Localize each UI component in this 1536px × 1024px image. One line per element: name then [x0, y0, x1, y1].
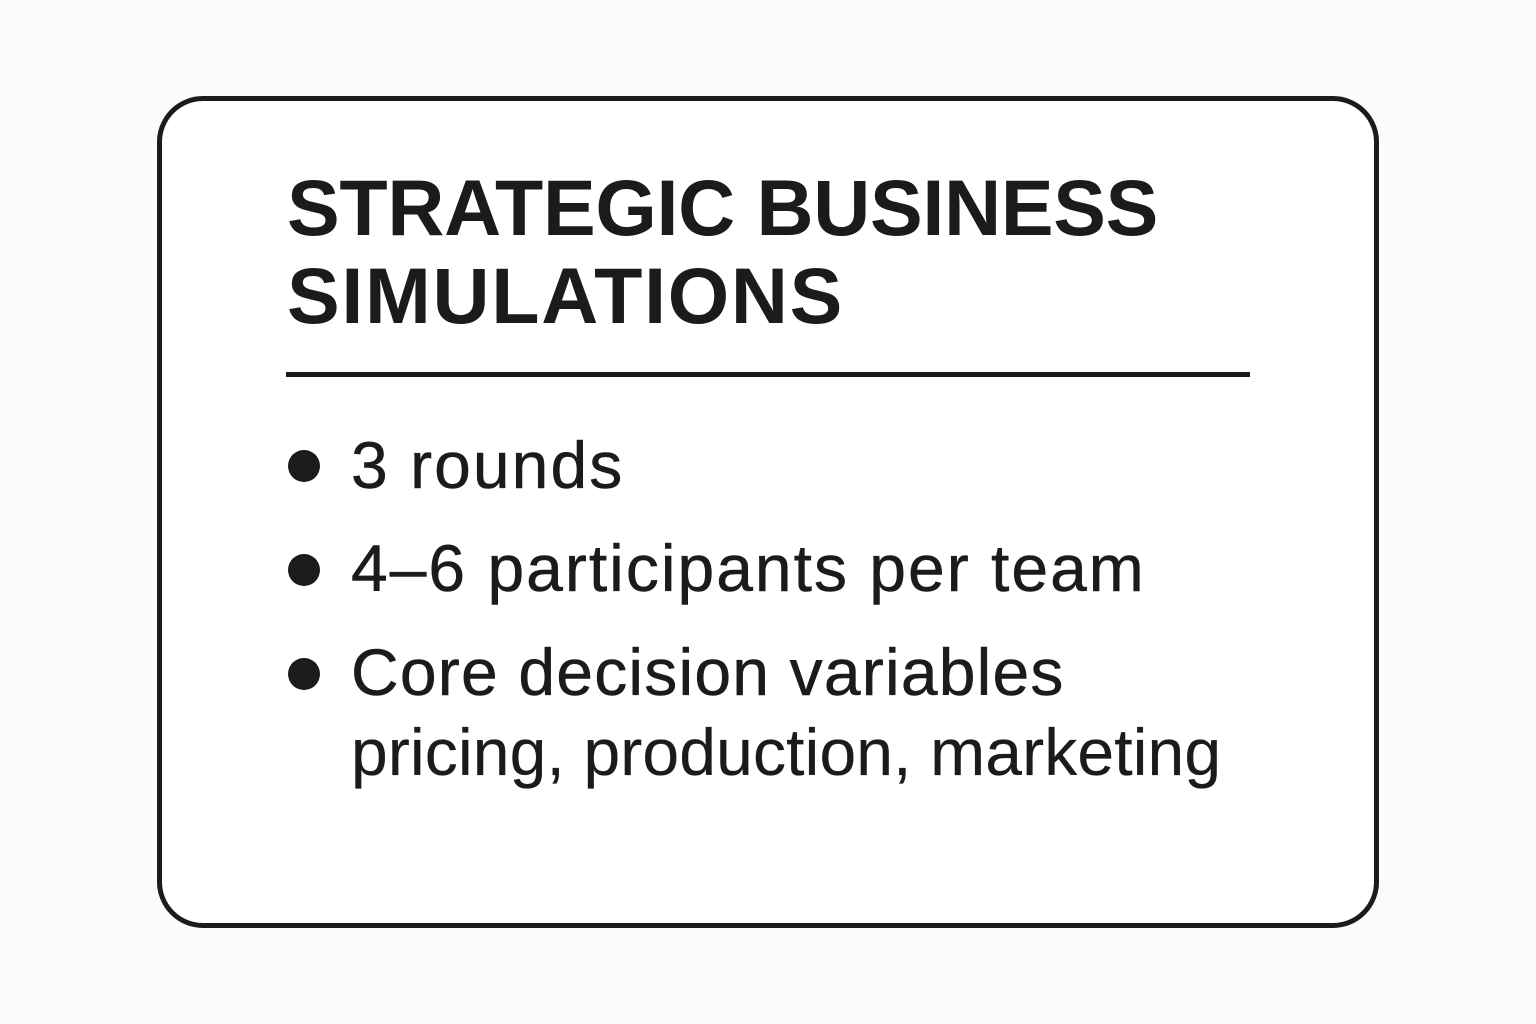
title — [287, 163, 1158, 340]
text: participants: 4–6 participants per team — [351, 531, 1146, 605]
icon: bullet 1 — [288, 450, 320, 482]
divider under title — [286, 372, 1250, 377]
title: STRATEGIC BUSINESS — [287, 163, 1158, 252]
bullet list — [288, 428, 1221, 789]
text: variables list: pricing, production, marketing — [351, 715, 1221, 789]
panel: strategic business simulations card — [157, 96, 1379, 928]
text: rounds: 3 rounds — [351, 428, 624, 502]
title: SIMULATIONS — [287, 251, 844, 340]
text: core decision variables: Core decision variables — [351, 635, 1065, 709]
icon: bullet 3 — [288, 658, 320, 690]
icon: bullet 2 — [288, 554, 320, 586]
